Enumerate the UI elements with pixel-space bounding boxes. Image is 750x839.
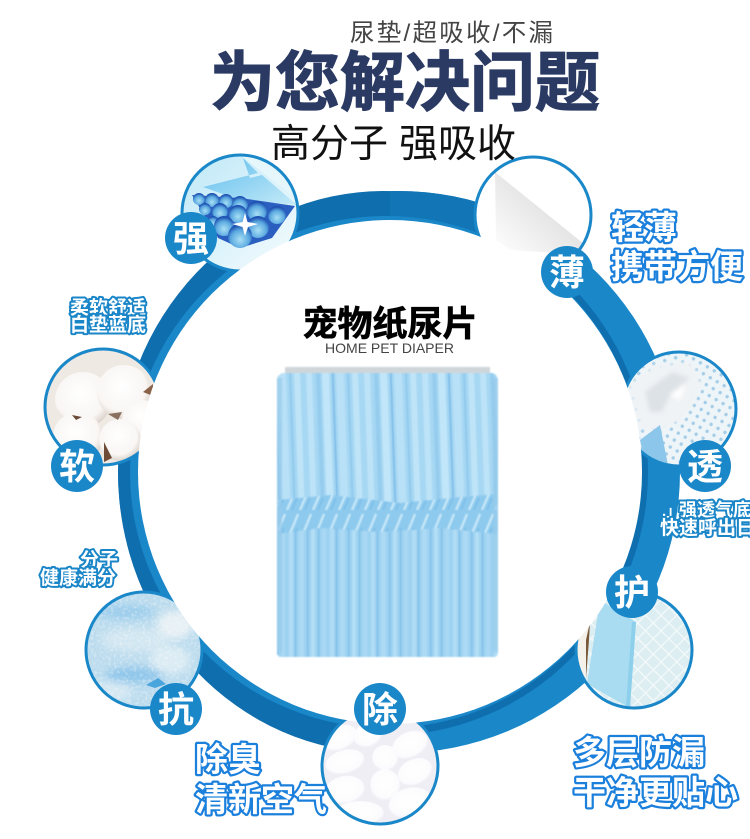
callout: multilayer leak proof: 多层防漏 xyxy=(573,734,705,771)
callout: breathable xyxy=(660,499,750,539)
callout: thin and portable xyxy=(611,209,743,285)
medallion ring: odour removal xyxy=(322,708,438,824)
medallion: thin sheet xyxy=(476,172,582,270)
callout: deodorise xyxy=(195,741,327,818)
callout: breathable: .」 xyxy=(662,503,681,520)
title: 为您解决问题 xyxy=(210,46,600,119)
medallion: antibacterial polymer xyxy=(88,594,200,706)
badge: thin: 薄 xyxy=(549,252,585,293)
callout: soft and comfortable: 白垫蓝底 xyxy=(70,313,146,336)
callout: deodorise: 清新空气 xyxy=(195,781,327,818)
medallion ring: strong xyxy=(182,155,298,271)
callout: deodorise: 除臭 xyxy=(195,741,261,778)
subtitle: 高分子 xyxy=(271,123,388,166)
medallion ring: soft xyxy=(45,349,161,465)
inner white disc xyxy=(138,220,642,724)
callout: thin and portable: 轻薄 xyxy=(611,209,677,246)
badge: breathable: 透 xyxy=(687,446,723,487)
callout: multilayer leak proof: 干净更贴心 xyxy=(573,774,738,811)
callout: multilayer leak proof xyxy=(573,734,738,811)
badge: anti xyxy=(150,683,202,735)
badge: strong xyxy=(165,212,217,264)
product subtitle: HOME PET DIAPER xyxy=(325,340,454,356)
badge: remove: 除 xyxy=(362,689,398,730)
badge: anti: 抗 xyxy=(158,689,194,730)
medallion: strong absorption beads xyxy=(184,156,296,270)
callout: polymer health xyxy=(40,549,118,589)
badge: soft xyxy=(51,440,103,492)
callout: thin and portable: 携带方便 xyxy=(611,248,743,285)
product title: 宠物纸尿片 xyxy=(302,305,478,344)
blue ring xyxy=(118,191,680,753)
medallion: leak protection layers xyxy=(578,598,690,706)
medallion ring: breathable xyxy=(622,352,736,466)
subtitle top line: 尿垫/超吸收/不漏 xyxy=(350,19,553,47)
medallion ring: leak protection xyxy=(576,592,692,708)
callout: soft and comfortable: 柔软舒适 xyxy=(70,296,146,319)
callout: breathable: 强透气底 xyxy=(679,499,750,520)
medallion ring: thin xyxy=(475,157,591,273)
medallion: odour removal puffs xyxy=(324,720,436,822)
product: stack of blue pads xyxy=(277,367,498,657)
badge: breathable xyxy=(679,440,731,492)
badge: protect xyxy=(606,566,658,618)
badge: soft: 软 xyxy=(59,446,95,487)
badge: remove xyxy=(354,683,406,735)
medallion: soft cotton xyxy=(46,350,154,464)
callout: polymer health: 健康满分 xyxy=(40,566,116,589)
badge: strong: 强 xyxy=(173,218,209,259)
badge: thin xyxy=(541,246,593,298)
subtitle: 强吸收 xyxy=(399,123,516,166)
badge: protect: 护 xyxy=(614,572,650,613)
callout: polymer health: 分子 xyxy=(80,549,118,571)
callout: soft and comfortable xyxy=(70,296,146,336)
medallion: breathable dotted fabric xyxy=(628,354,734,464)
medallion ring: antibacterial xyxy=(86,592,202,708)
